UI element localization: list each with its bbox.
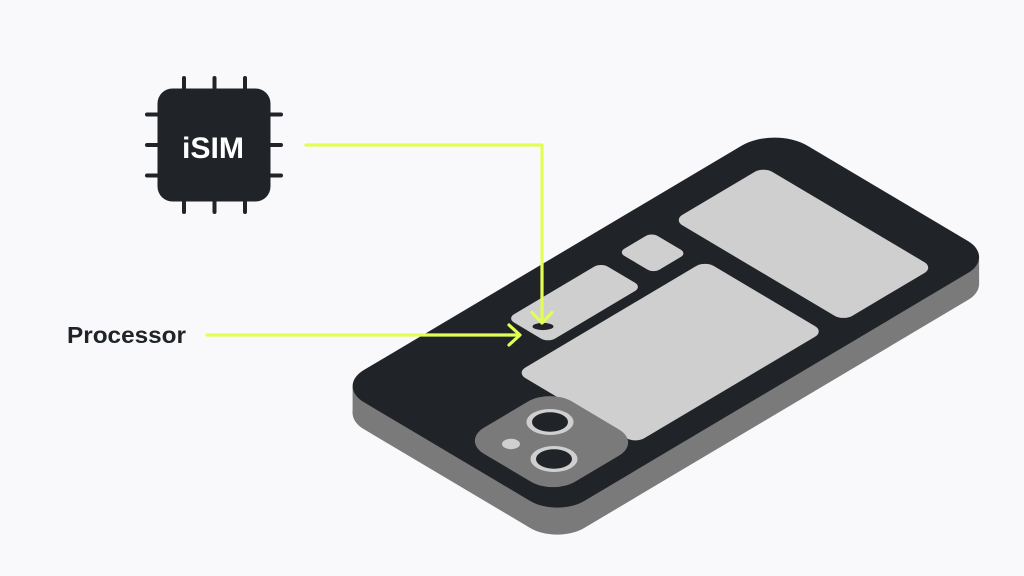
label: Processor: Processor	[67, 322, 186, 348]
lower lens	[530, 446, 578, 472]
phone back	[337, 126, 995, 517]
phone side edge	[337, 153, 995, 544]
panel: large upper component	[674, 167, 934, 321]
chip label: iSIM	[182, 132, 244, 165]
flash	[502, 439, 520, 449]
phone	[337, 126, 995, 544]
iSIM spot on processor	[532, 323, 554, 330]
internal panels	[466, 166, 934, 444]
upper lens	[526, 409, 574, 435]
arrow: Processor label to board	[207, 325, 520, 345]
panel: processor board	[507, 263, 642, 343]
panel: small square component	[618, 232, 687, 273]
camera module	[462, 388, 641, 495]
chip body	[158, 88, 270, 202]
arrow: iSIM to processor spot	[306, 145, 552, 323]
icon: iSIM chip	[147, 78, 281, 212]
chip pins	[147, 78, 281, 212]
camera bump	[462, 388, 641, 495]
panel: battery	[516, 261, 824, 443]
